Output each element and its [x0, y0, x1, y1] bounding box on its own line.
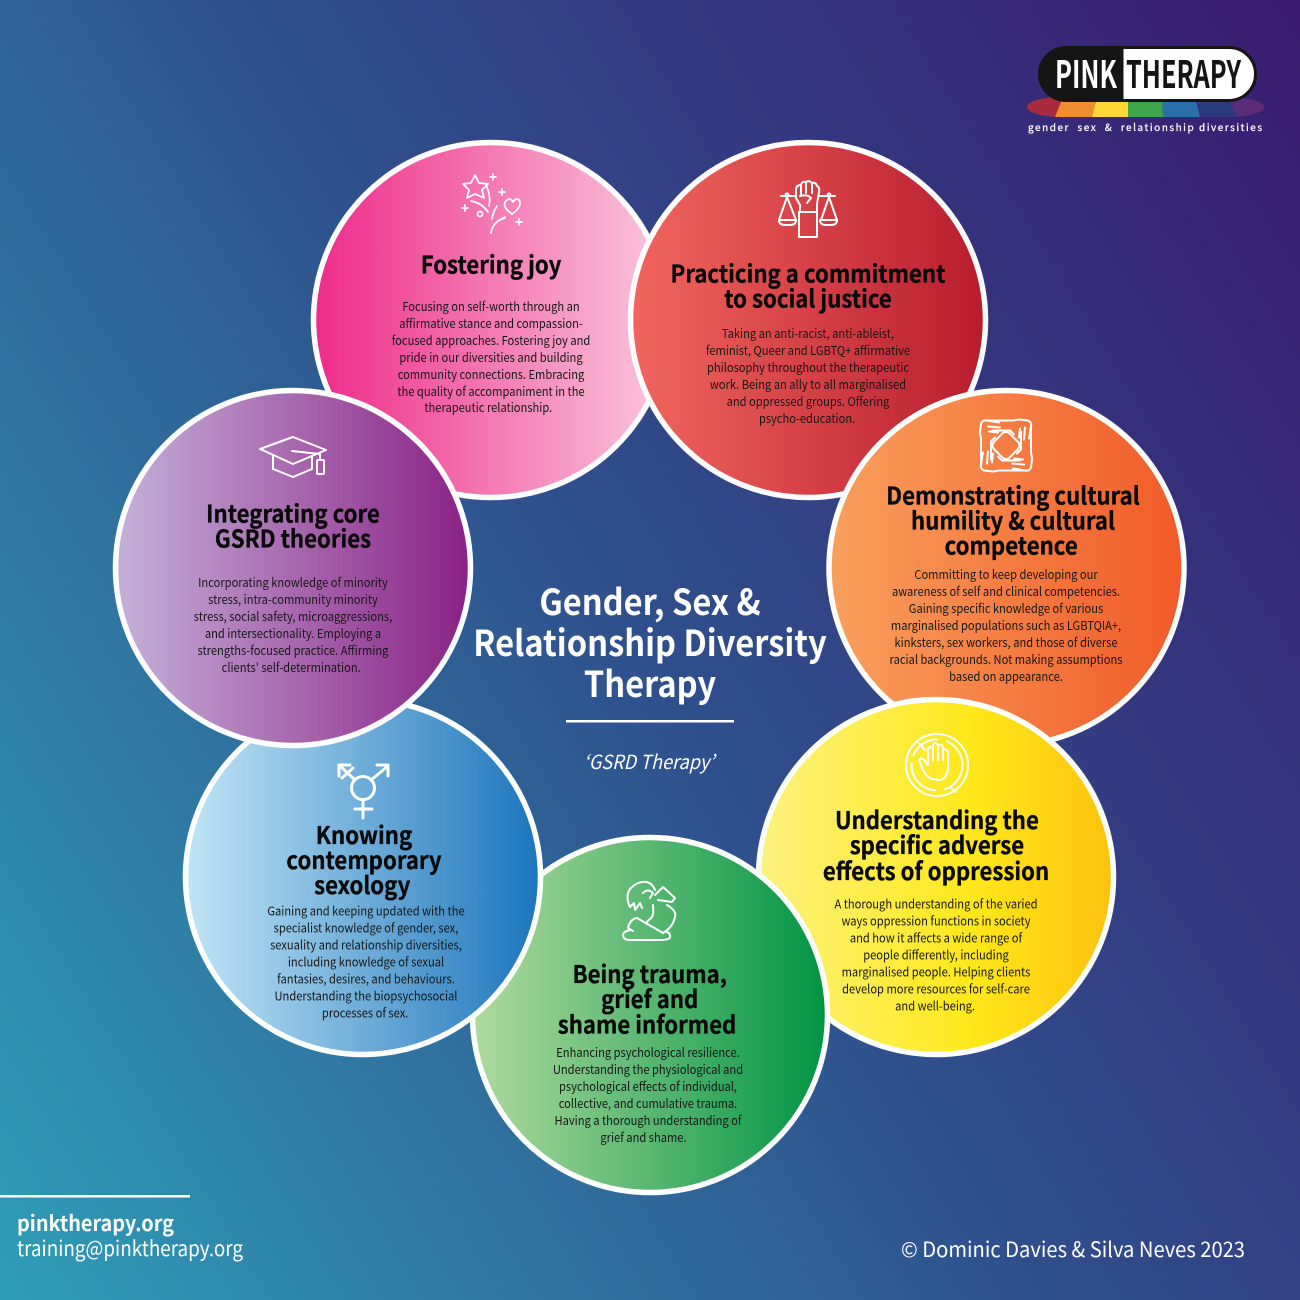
body text: social justice: psycho-education. [759, 409, 855, 427]
body text: cultural humility: awareness of self and clinical competencies. [892, 582, 1120, 600]
heading: core GSRD theories: GSRD theories [215, 519, 371, 555]
heading: social justice: Practicing a commitment [671, 254, 946, 290]
body text: trauma, grief and shame: grief and shame. [600, 1128, 687, 1146]
body text: trauma, grief and shame: psychological effects of individual, [559, 1077, 737, 1095]
body text: adverse effects of oppression: marginalised people. Helping clients [842, 963, 1031, 981]
body text: cultural humility: Committing to keep developing our [914, 565, 1098, 583]
heading: social justice: to social justice [724, 279, 892, 315]
body text: contemporary sexology: processes of sex. [322, 1004, 408, 1022]
body text: fostering joy: focused approaches. Fostering joy and [392, 331, 590, 349]
body text: cultural humility: marginalised populations such as LGBTQIA+, [891, 616, 1121, 634]
body text: core GSRD theories: stress, intra-community minority [208, 590, 378, 608]
heading: cultural humility: humility & cultural [911, 501, 1115, 537]
body text: cultural humility: Gaining specific knowledge of various [909, 599, 1104, 617]
panel: trauma, grief and shame [472, 838, 828, 1192]
icon: transgender symbol [339, 765, 388, 818]
heading: cultural humility: competence [945, 526, 1078, 562]
logo rainbow band [1027, 97, 1264, 117]
body text: adverse effects of oppression: ways oppression functions in society [841, 912, 1031, 930]
body text: cultural humility: kinksters, sex workers, and those of diverse [895, 633, 1118, 651]
body text: core GSRD theories: and intersectionality. Employing a [205, 624, 381, 642]
body text: fostering joy: community connections. Embracing [398, 365, 585, 383]
body text: adverse effects of oppression: and how it affects a wide range of [850, 929, 1023, 947]
heading: contemporary sexology: contemporary [286, 841, 442, 876]
body text: social justice: Taking an anti-racist, anti-ableist, [722, 324, 894, 342]
logo wordmark THERAPY: THERAPY [1126, 44, 1242, 99]
email: training@pinktherapy.org [17, 1233, 243, 1263]
body text: adverse effects of oppression: develop more resources for self-care [842, 980, 1030, 998]
logo wordmark PINK: PINK [1055, 44, 1118, 99]
body text: social justice: work. Being an ally to all marginalised [710, 375, 906, 393]
body text: core GSRD theories: clients' self-determination. [222, 658, 361, 676]
body text: fostering joy: Focusing on self-worth through an [402, 297, 580, 315]
icon: fist and scales [779, 181, 837, 237]
heading: contemporary sexology: Knowing [316, 816, 412, 851]
body text: cultural humility: based on appearance. [949, 667, 1063, 685]
body text: contemporary sexology: including knowledge of sexual [288, 953, 444, 971]
heading: adverse effects of oppression: Understanding the [835, 801, 1039, 836]
website: pinktherapy.org [17, 1208, 174, 1238]
body text: fostering joy: the quality of accompaniment in the [397, 382, 585, 400]
icon: seated grieving figure [623, 882, 675, 940]
heading: trauma, grief and shame: shame informed [558, 1005, 736, 1041]
heading: adverse effects of oppression: effects of oppression [823, 852, 1049, 887]
panel: core GSRD theories [116, 390, 470, 746]
body text: trauma, grief and shame: Understanding the physiological and [553, 1060, 743, 1078]
body text: social justice: philosophy throughout the therapeutic [707, 358, 909, 376]
panel: contemporary sexology [186, 700, 540, 1054]
heading: cultural humility: Demonstrating cultural [886, 476, 1140, 512]
body text: fostering joy: pride in our diversities and building [399, 348, 583, 366]
heading: core GSRD theories: Integrating core [206, 494, 380, 530]
footer: contact details [0, 1195, 243, 1263]
body text: fostering joy: therapeutic relationship. [424, 398, 552, 416]
body text: adverse effects of oppression: and well-being. [895, 997, 975, 1015]
body text: core GSRD theories: stress, social safety, microaggressions, [194, 607, 392, 625]
body text: contemporary sexology: specialist knowledge of gender, sex, [274, 919, 458, 937]
panel: adverse effects of oppression [758, 700, 1114, 1054]
body text: adverse effects of oppression: A thorough understanding of the varied [834, 895, 1038, 913]
body text: contemporary sexology: Understanding the biopsychosocial [275, 987, 457, 1005]
body text: cultural humility: racial backgrounds. Not making assumptions [890, 650, 1123, 668]
footer: copyright: © Dominic Davies & Silva Neves 2023 [901, 1234, 1245, 1264]
panel: fostering joy [314, 142, 668, 498]
icon: fireworks star and heart [462, 174, 522, 233]
heading: trauma, grief and shame: Being trauma, [573, 955, 727, 990]
logo pill [1038, 46, 1256, 102]
body text: social justice: feminist, Queer and LGBTQ+ affirmative [706, 341, 910, 359]
body text: contemporary sexology: sexuality and relationship diversities, [270, 936, 462, 954]
heading: trauma, grief and shame: grief and [601, 980, 698, 1015]
body text: fostering joy: affirmative stance and compassion- [399, 314, 583, 332]
logo: Pink Therapy [1027, 44, 1264, 134]
body text: trauma, grief and shame: Enhancing psychological resilience. [556, 1043, 740, 1061]
title: central heading: Gender, Sex & [539, 573, 761, 625]
heading: contemporary sexology: sexology [314, 866, 411, 901]
body text: adverse effects of oppression: people differently, including [863, 946, 1009, 964]
icon: graduation cap [260, 437, 326, 477]
body text: trauma, grief and shame: Having a thorough understanding of [554, 1111, 743, 1129]
icon: four linked hands [980, 420, 1032, 472]
body text: social justice: and oppressed groups. Offering [727, 392, 890, 410]
title: central heading: Therapy [584, 655, 717, 707]
title: central heading: Relationship Diversity [473, 614, 827, 666]
heading: adverse effects of oppression: specific adverse [850, 826, 1024, 861]
divider under title [566, 720, 734, 722]
heading: fostering joy: Fostering joy [421, 245, 562, 281]
panel: cultural humility [829, 390, 1184, 746]
body text: core GSRD theories: Incorporating knowledge of minority [198, 573, 388, 591]
logo tagline: gender sex & relationship diversities [1028, 119, 1262, 134]
body text: trauma, grief and shame: collective, and cumulative trauma. [559, 1094, 737, 1112]
panel: social justice [630, 142, 986, 498]
body text: contemporary sexology: Gaining and keeping updated with the [267, 902, 465, 920]
icon: raised hand in stop circle [906, 734, 968, 796]
body text: core GSRD theories: strengths-focused practice. Affirming [198, 641, 389, 659]
body text: contemporary sexology: fantasies, desires, and behaviours. [277, 970, 455, 988]
subtitle: GSRD Therapy: ‘GSRD Therapy’ [584, 747, 717, 775]
